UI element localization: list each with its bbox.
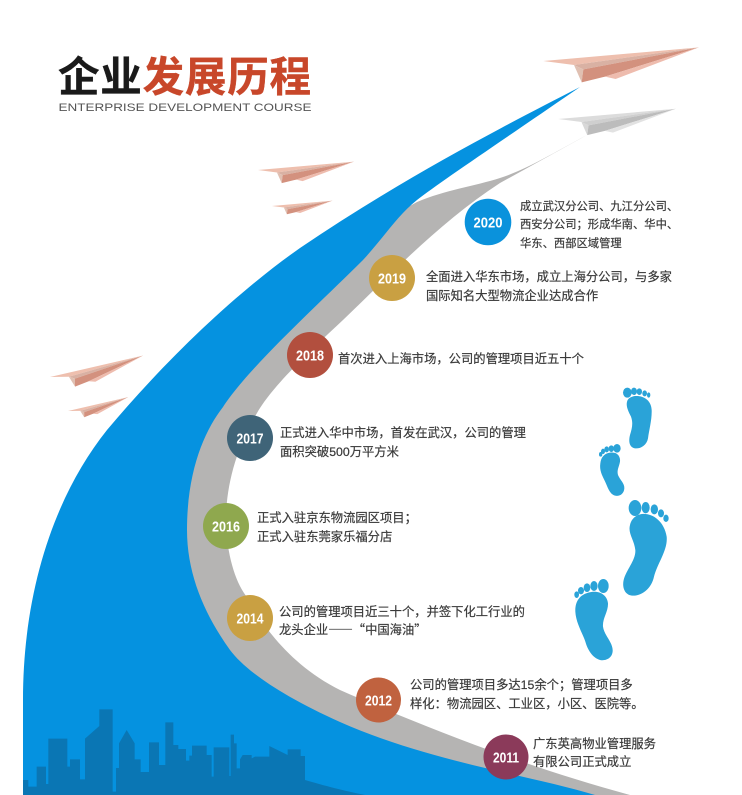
milestone 2016: 2016 (212, 518, 240, 536)
milestone 2011: 有限公司正式成立 (533, 754, 631, 769)
paper plane: lower middle (272, 201, 333, 214)
milestone 2018: 2018 (296, 348, 324, 364)
milestone 2019: 国际知名大型物流企业达成合作 (426, 288, 598, 303)
milestone 2014 (227, 595, 525, 641)
icon: footprint 2 (599, 444, 624, 496)
icon: footprint 4 (574, 579, 613, 660)
milestone 2017 (227, 415, 526, 461)
milestone 2019 (369, 255, 672, 303)
milestone 2016: 正式入驻京东物流园区项目； (257, 510, 417, 525)
city skyline (20, 709, 370, 795)
milestone 2014: 龙头企业——“中国海油” (279, 620, 427, 638)
icon: footprint 3 (623, 500, 669, 596)
milestone 2011: 广东英高物业管理服务 (533, 736, 656, 751)
milestone 2020: 2020 (474, 214, 502, 232)
milestone 2020: 成立武汉分公司、九江分公司、 (520, 199, 678, 213)
milestone 2014: 公司的管理项目近三十个，并签下化工行业的 (279, 604, 525, 619)
milestone 2016: 正式入驻东莞家乐福分店 (257, 529, 392, 544)
milestone 2012: 样化：物流园区、工业区，小区、医院等。 (410, 696, 644, 711)
gray ribbon (170, 135, 630, 795)
milestone 2011 (484, 734, 656, 780)
icon: footprint 1 (623, 388, 652, 448)
blue ribbon (23, 87, 595, 795)
paper plane: left lower (67, 397, 130, 419)
milestone 2011: 2011 (493, 750, 519, 766)
milestone 2020: 华东、西部区域管理 (520, 236, 622, 250)
milestone 2019: 2019 (378, 270, 406, 288)
title: 企业发展历程 (58, 54, 311, 100)
milestone 2020 (465, 199, 678, 250)
milestone 2014: 2014 (236, 610, 264, 628)
milestone 2012: 2012 (365, 692, 392, 710)
milestone 2017: 正式进入华中市场，首发在武汉，公司的管理 (280, 425, 526, 440)
paper plane: large gray (558, 109, 676, 135)
footprints (574, 388, 669, 660)
milestone 2020: 西安分公司；形成华南、华中、 (520, 217, 678, 231)
milestone 2017: 2017 (236, 430, 264, 448)
milestone 2012: 公司的管理项目多达15余个；管理项目多 (410, 677, 633, 692)
paper plane: upper middle (258, 162, 354, 183)
paper plane: large pink (543, 47, 699, 82)
milestone 2018: 首次进入上海市场，公司的管理项目近五十个 (338, 351, 584, 366)
milestone 2012 (356, 677, 644, 722)
milestone 2019: 全面进入华东市场，成立上海分公司，与多家 (426, 269, 672, 284)
milestone 2017: 面积突破500万平方米 (280, 444, 399, 459)
paper plane: left upper (49, 355, 146, 390)
milestone 2018 (287, 332, 584, 378)
milestone 2016 (203, 503, 417, 549)
title: ENTERPRISE DEVELOPMENT COURSE (58, 102, 312, 114)
